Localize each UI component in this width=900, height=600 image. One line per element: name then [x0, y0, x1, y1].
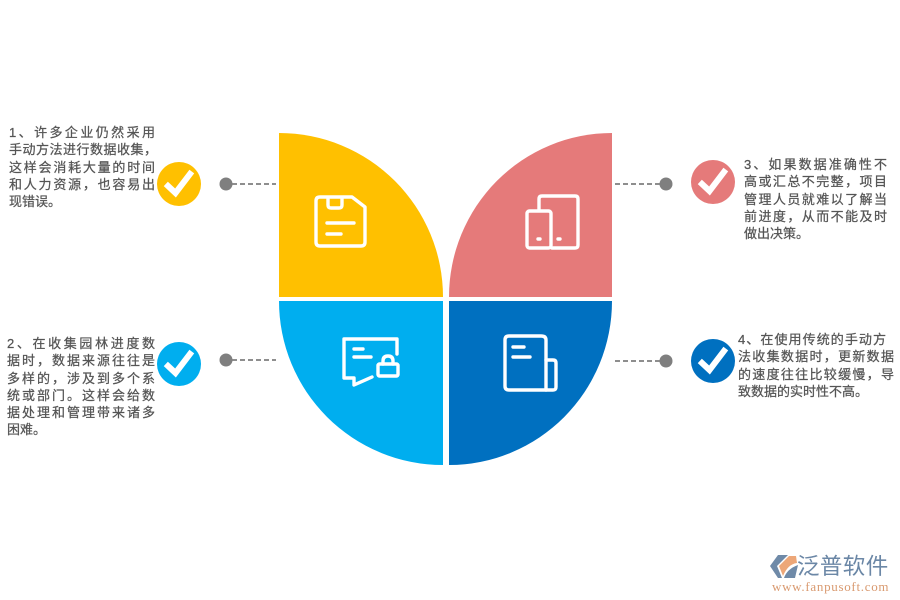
text block: point 2: 据时，数据来源往往是	[7, 353, 155, 368]
text block: point 2: 2、在收集园林进度数	[7, 336, 155, 351]
text block: point 4: 4、在使用传统的手动方	[738, 332, 886, 347]
panel: pink petal	[449, 133, 612, 297]
panel: dark blue petal	[449, 301, 612, 465]
icon: chat bubble with lock	[344, 339, 398, 385]
text block: point 3: 管理人员就难以了解当	[744, 192, 887, 207]
connector: bottom right	[615, 354, 672, 368]
logo url: www.fanpusoft.com	[772, 579, 889, 594]
connector: top left	[220, 178, 276, 190]
text block: point 3: 高或汇总不完整，项目	[744, 174, 887, 189]
icon: pink check badge	[691, 160, 735, 204]
icon: logo mark	[770, 555, 798, 578]
text block: point 1: 和人力资源，也容易出	[9, 177, 155, 192]
logo wordmark: 泛普软件	[797, 554, 889, 579]
text block: point 4: 法收集数据时，更新数据	[738, 349, 894, 364]
text block: point 2	[7, 336, 155, 437]
connector: bottom left	[220, 354, 276, 366]
text block: point 1: 1、许多企业仍然采用	[9, 125, 155, 140]
text block: point 4: 的速度往往比较缓慢，导	[738, 367, 894, 382]
text block: point 3	[744, 157, 887, 241]
text block: point 3: 3、如果数据准确性不	[744, 157, 887, 172]
panel: yellow petal	[279, 133, 443, 297]
text block: point 3: 做出决策。	[744, 226, 809, 241]
panel: light blue petal	[279, 301, 443, 465]
icon: floppy disk	[316, 197, 365, 246]
icon: yellow check badge	[157, 162, 201, 206]
text block: point 1: 现错误。	[9, 194, 61, 209]
text block: point 1: 手动方法进行数据收集，	[9, 142, 157, 157]
text block: point 1: 这样会消耗大量的时间	[9, 160, 155, 175]
text block: point 2: 据处理和管理带来诸多	[7, 405, 155, 420]
text block: point 2: 困难。	[7, 422, 46, 437]
text block: point 4: 致数据的实时性不高。	[738, 384, 868, 399]
text block: point 3: 前进度，从而不能及时	[744, 209, 887, 224]
icon: two tablets	[527, 196, 578, 248]
text block: point 4	[738, 332, 894, 399]
icon: light blue check badge	[157, 342, 201, 386]
text block: point 2: 多样的，涉及到多个系	[7, 371, 155, 386]
icon: dark blue check badge	[691, 339, 735, 383]
text block: point 2: 统或部门。这样会给数	[7, 388, 155, 403]
icon: document with tab	[505, 336, 556, 390]
connector: top right	[615, 178, 672, 190]
text block: point 1	[9, 125, 157, 209]
logo: Fanpu Software	[770, 554, 889, 594]
